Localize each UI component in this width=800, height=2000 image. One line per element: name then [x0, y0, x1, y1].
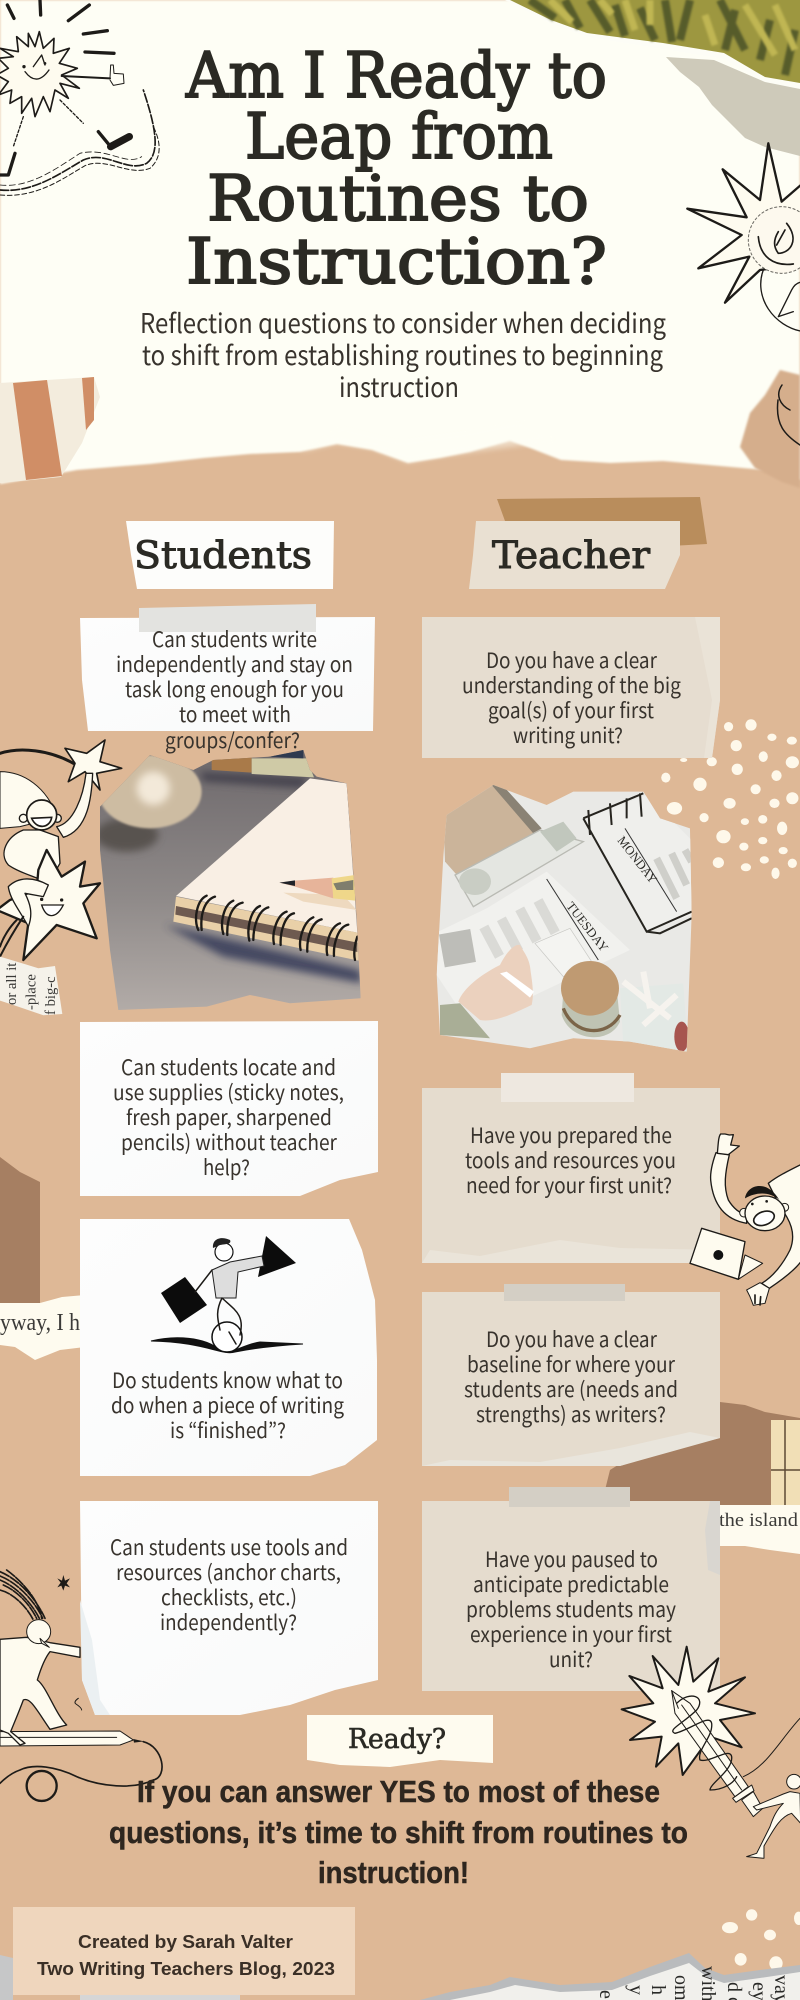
- subtitle: instruction: [339, 366, 459, 405]
- grid paper: [771, 1420, 800, 1515]
- newspaper scrap: f big-c: [43, 976, 59, 1015]
- left newspaper strip: [0, 1295, 85, 1360]
- question text: Have you prepared the: [470, 1120, 672, 1150]
- icon: star with spiral face: [687, 143, 800, 332]
- torn grey paper: [666, 57, 800, 156]
- question text: Do you have a clear: [486, 645, 658, 675]
- question text: Do you have a clear: [486, 1324, 658, 1354]
- question text: Do students know what to: [112, 1365, 343, 1395]
- tape: [509, 1487, 630, 1507]
- teacher card 2: [422, 1073, 720, 1263]
- left newspaper strip: yway, I h: [0, 1310, 80, 1336]
- question text: groups/confer?: [165, 725, 300, 755]
- label: Students: Students: [134, 534, 312, 577]
- brown torn scrap: [740, 370, 800, 488]
- question text: use supplies (sticky notes,: [113, 1077, 344, 1107]
- bottom torn newspaper: [0, 1953, 800, 2000]
- left brown torn paper: [0, 1157, 40, 1303]
- question text: [464, 1324, 678, 1429]
- conclusion text: questions, it’s time to shift from routines to: [109, 1815, 688, 1850]
- question text: pencils) without teacher: [121, 1127, 338, 1157]
- right newspaper strip: [719, 1505, 800, 1554]
- question text: baseline for where your: [467, 1349, 676, 1379]
- question text: [116, 624, 353, 755]
- decorative dots: top right: [661, 719, 799, 879]
- icon: figure on unicycle with shapes: [151, 1236, 303, 1353]
- conclusion text: If you can answer YES to most of these: [137, 1774, 660, 1809]
- conclusion text: instruction!: [318, 1855, 469, 1890]
- student card 1: [80, 604, 375, 755]
- question text: independently and stay on: [116, 649, 353, 679]
- question text: help?: [203, 1152, 250, 1182]
- label: Ready?: Ready?: [348, 1724, 446, 1755]
- right newspaper strip: the island: [719, 1510, 799, 1531]
- question text: anticipate predictable: [473, 1569, 669, 1599]
- bottom torn newspaper: y: [625, 1985, 647, 1995]
- illustration: waving teacher with laptop: [690, 1134, 800, 1305]
- student card 4: [80, 1501, 378, 1715]
- question text: [111, 1365, 344, 1445]
- question text: [465, 1120, 676, 1200]
- title: Leap from: [245, 100, 553, 173]
- question text: need for your first unit?: [466, 1170, 672, 1200]
- label: MONDAY: MONDAY: [614, 834, 660, 886]
- question text: task long enough for you: [125, 674, 344, 704]
- question text: [462, 645, 681, 750]
- conclusion text: [109, 1774, 688, 1890]
- credit box: Two Writing Teachers Blog, 2023: [37, 1959, 335, 1979]
- tape: [504, 1284, 625, 1301]
- student card 2: [80, 1021, 378, 1196]
- question text: experience in your first: [470, 1619, 672, 1649]
- title: Instruction?: [186, 225, 607, 298]
- question text: to meet with: [179, 699, 291, 729]
- subtitle: [140, 302, 666, 405]
- question text: independently?: [160, 1607, 297, 1637]
- credit box: [13, 1907, 355, 1995]
- icon: running sun: [0, 0, 159, 195]
- question text: is “finished”?: [170, 1415, 286, 1445]
- question text: Can students locate and: [121, 1052, 336, 1082]
- student card 3: [80, 1219, 377, 1476]
- bottom torn newspaper: h: [647, 1985, 669, 1995]
- question text: fresh paper, sharpened: [126, 1102, 332, 1132]
- photo: desk planner: [436, 785, 692, 1052]
- teacher card 3: [422, 1284, 720, 1466]
- label: TUESDAY: TUESDAY: [563, 899, 611, 955]
- tape: [501, 1073, 634, 1102]
- decorative dots: bottom right: [722, 1909, 800, 1970]
- question text: [466, 1544, 676, 1674]
- question text: do when a piece of writing: [111, 1390, 344, 1420]
- question text: [110, 1532, 348, 1637]
- cream header with torn edge: [0, 0, 800, 484]
- title: [185, 39, 607, 298]
- illustration: starburst, sword and figure: [622, 1647, 800, 1858]
- question text: checklists, etc.): [161, 1582, 297, 1612]
- teacher card 4: [422, 1487, 720, 1691]
- photo: notebook and pencil: [100, 750, 360, 1010]
- question text: tools and resources you: [465, 1145, 676, 1175]
- label: Students: [126, 521, 334, 589]
- label: Teacher: [469, 521, 680, 589]
- striped torn paper: [0, 377, 100, 483]
- newspaper scrap: [0, 957, 62, 1015]
- question text: problems students may: [466, 1594, 676, 1624]
- illustration: monkey on star: [0, 740, 122, 1015]
- tape: [139, 604, 316, 632]
- tape: brown behind teacher: [497, 497, 707, 546]
- question text: students are (needs and: [464, 1374, 678, 1404]
- question text: unit?: [549, 1644, 593, 1674]
- question text: resources (anchor charts,: [116, 1557, 341, 1587]
- question text: Have you paused to: [485, 1544, 658, 1574]
- question text: understanding of the big: [462, 670, 681, 700]
- illustration: figure surfing on pencil: [0, 1570, 162, 1801]
- label: Ready?: [307, 1715, 493, 1767]
- title: Routines to: [207, 162, 589, 235]
- newspaper scrap: or all it: [4, 963, 20, 1005]
- teacher card 1: [422, 617, 720, 758]
- question text: Can students write: [152, 624, 317, 654]
- question text: Can students use tools and: [110, 1532, 348, 1562]
- question text: writing unit?: [513, 720, 623, 750]
- subtitle: Reflection questions to consider when deciding: [140, 302, 666, 341]
- bottom torn newspaper: e: [595, 1990, 617, 1999]
- subtitle: to shift from establishing routines to beginning: [142, 334, 663, 373]
- title: Am I Ready to: [185, 39, 607, 112]
- torn foliage paper: [505, 0, 800, 89]
- newspaper scrap: -place: [23, 974, 39, 1010]
- question text: strengths) as writers?: [476, 1399, 666, 1429]
- bottom torn newspaper: om: [670, 1975, 692, 2000]
- credit box: Created by Sarah Valter: [78, 1932, 293, 1952]
- label: Teacher: Teacher: [492, 534, 650, 577]
- question text: [113, 1052, 344, 1182]
- right brown torn paper: [600, 1402, 800, 1515]
- question text: goal(s) of your first: [488, 695, 654, 725]
